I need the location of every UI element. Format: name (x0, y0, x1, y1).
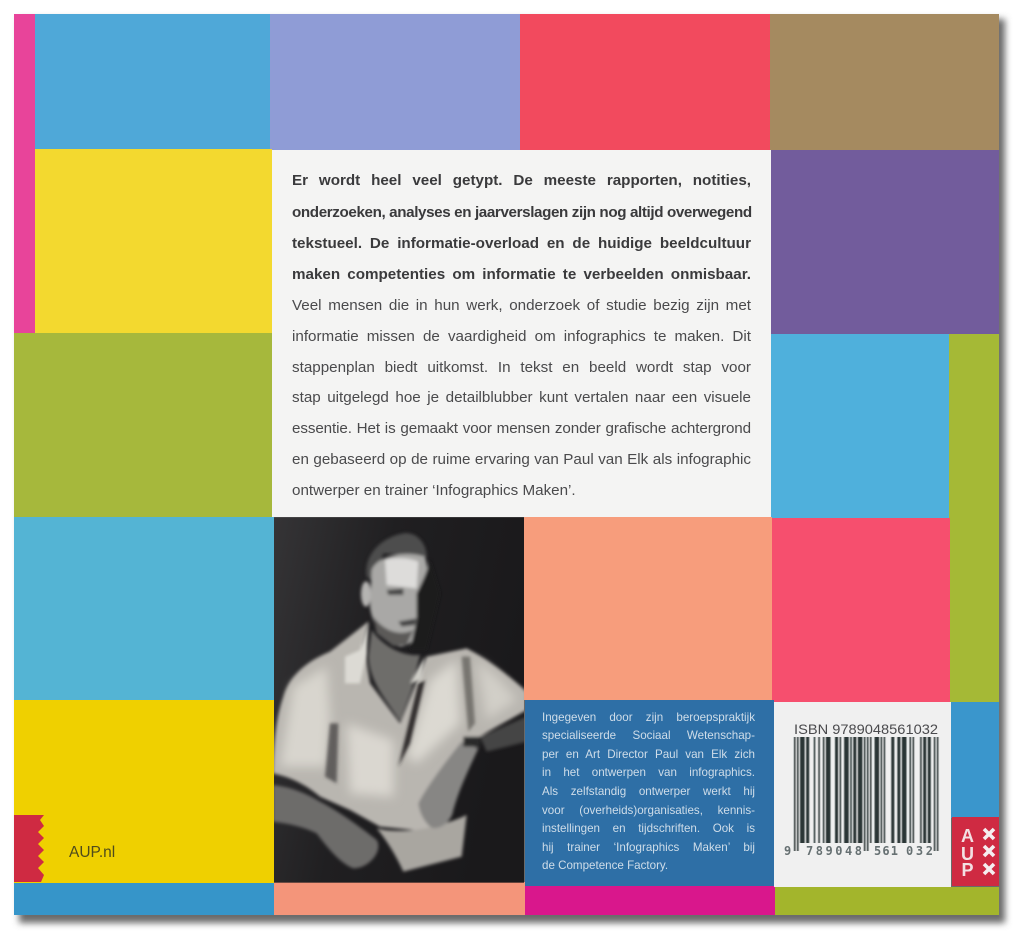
block: blue bottom (14, 883, 274, 915)
logo letters: U (961, 844, 974, 864)
left forearm (273, 785, 378, 868)
right hand (418, 742, 478, 828)
block: blue right (771, 334, 949, 518)
barcode: 561 (874, 844, 898, 858)
text panel: introduction: tekstueel. De informatie-overload en de huidige beeldcultuur (292, 235, 751, 252)
block: lavender (270, 14, 520, 150)
block: purple (771, 150, 999, 334)
shirt folds (325, 723, 338, 783)
block: blue small (951, 702, 999, 818)
text panel: author biography: specialiseerde Sociaal Wetenschap- (542, 729, 755, 742)
beard (373, 617, 413, 646)
text panel: introduction: stap uitgelegd hoe je detailblubber kunt vertalen naar een visuele (292, 389, 751, 406)
logo letters: P (961, 860, 974, 880)
barcode (784, 721, 938, 858)
right forearm (480, 717, 527, 752)
barcode bars (794, 737, 938, 851)
hair (366, 533, 427, 582)
text panel: introduction: en gebaseerd op de ruime ervaring van Paul van Elk als infographic (292, 451, 751, 468)
text panel: introduction (272, 150, 771, 517)
block: brown (770, 14, 999, 150)
block: yellow upper (35, 149, 272, 333)
block: blue top (35, 14, 270, 149)
text panel: author biography: per en Art Director Paul van Elk zich (542, 748, 755, 761)
ISBN label: ISBN 9789048561032 (794, 721, 938, 737)
barcode digits: 9 (784, 844, 791, 858)
block: magenta strip (14, 14, 35, 333)
block: salmon bottom (274, 882, 525, 915)
logo letters: A (961, 826, 974, 846)
text panel: introduction: informatie missen de vaardigheid om infographics te maken. Dit (292, 328, 751, 345)
text panel: introduction: Veel mensen die in hun werk, onderzoek of studie bezig zijn met (292, 297, 751, 314)
text panel: author biography: hij trainer ‘Infographics Maken’ bij (542, 841, 755, 854)
publisher stamp: red serrated edge (14, 815, 44, 882)
text panel: author biography: Ingegeven door zijn beroepspraktijk (542, 711, 755, 724)
watch (463, 737, 480, 747)
block: turquoise (14, 517, 274, 700)
publisher website: AUP.nl (69, 844, 115, 861)
text panel: introduction: ontwerper en trainer ‘Infographics Maken’. (292, 482, 576, 499)
chest (368, 630, 420, 722)
face shadow (410, 562, 432, 646)
block: yellow lower (14, 700, 274, 883)
block: red (520, 14, 770, 150)
collar (345, 622, 368, 683)
text panel: introduction: essentie. Het is gemaakt voor mensen zonder grafische achtergrond (292, 420, 751, 437)
text panel: introduction: maken competenties om informatie te verbeelden onmisbaar. (292, 266, 751, 283)
text panel: author biography: voor (overheids)organisaties, kennis- (542, 804, 755, 817)
logo letters (961, 826, 974, 880)
AUP logo (952, 817, 999, 886)
shirt highlights (280, 667, 330, 767)
block: coral pink (772, 518, 950, 702)
shirt (273, 622, 527, 832)
logo crosses (984, 829, 994, 874)
eye and mouth (387, 588, 403, 595)
block: green bottom (775, 887, 999, 915)
block: green left (14, 333, 273, 517)
text panel: introduction: stappenplan biedt uitkomst. In tekst en beeld wordt stap voor (292, 359, 751, 376)
block: white barcode panel (774, 702, 951, 887)
block: salmon (524, 517, 772, 700)
text panel: author biography: instellingen en tijdschriften. Ook is (542, 822, 755, 835)
text panel: author biography: de Competence Factory. (542, 859, 668, 872)
block: green right strip (949, 334, 999, 702)
block: magenta bottom (525, 885, 775, 915)
text panel: introduction: onderzoeken, analyses en jaarverslagen zijn nog altijd overwegend (292, 204, 752, 221)
text panel: author biography: in het ontwerpen van infographics. (542, 766, 755, 779)
text panel: author biography (525, 700, 774, 886)
shirt tail (377, 815, 467, 872)
text panel: introduction: Er wordt heel veel getypt. De meeste rapporten, notities, (292, 172, 751, 189)
face (370, 554, 430, 647)
barcode: 789048 (806, 844, 862, 858)
text panel: author biography: Als zelfstandig ontwerper werkt hij (542, 785, 755, 798)
ear (361, 581, 371, 607)
barcode: 032 (906, 844, 933, 858)
portrait photo (273, 517, 527, 883)
